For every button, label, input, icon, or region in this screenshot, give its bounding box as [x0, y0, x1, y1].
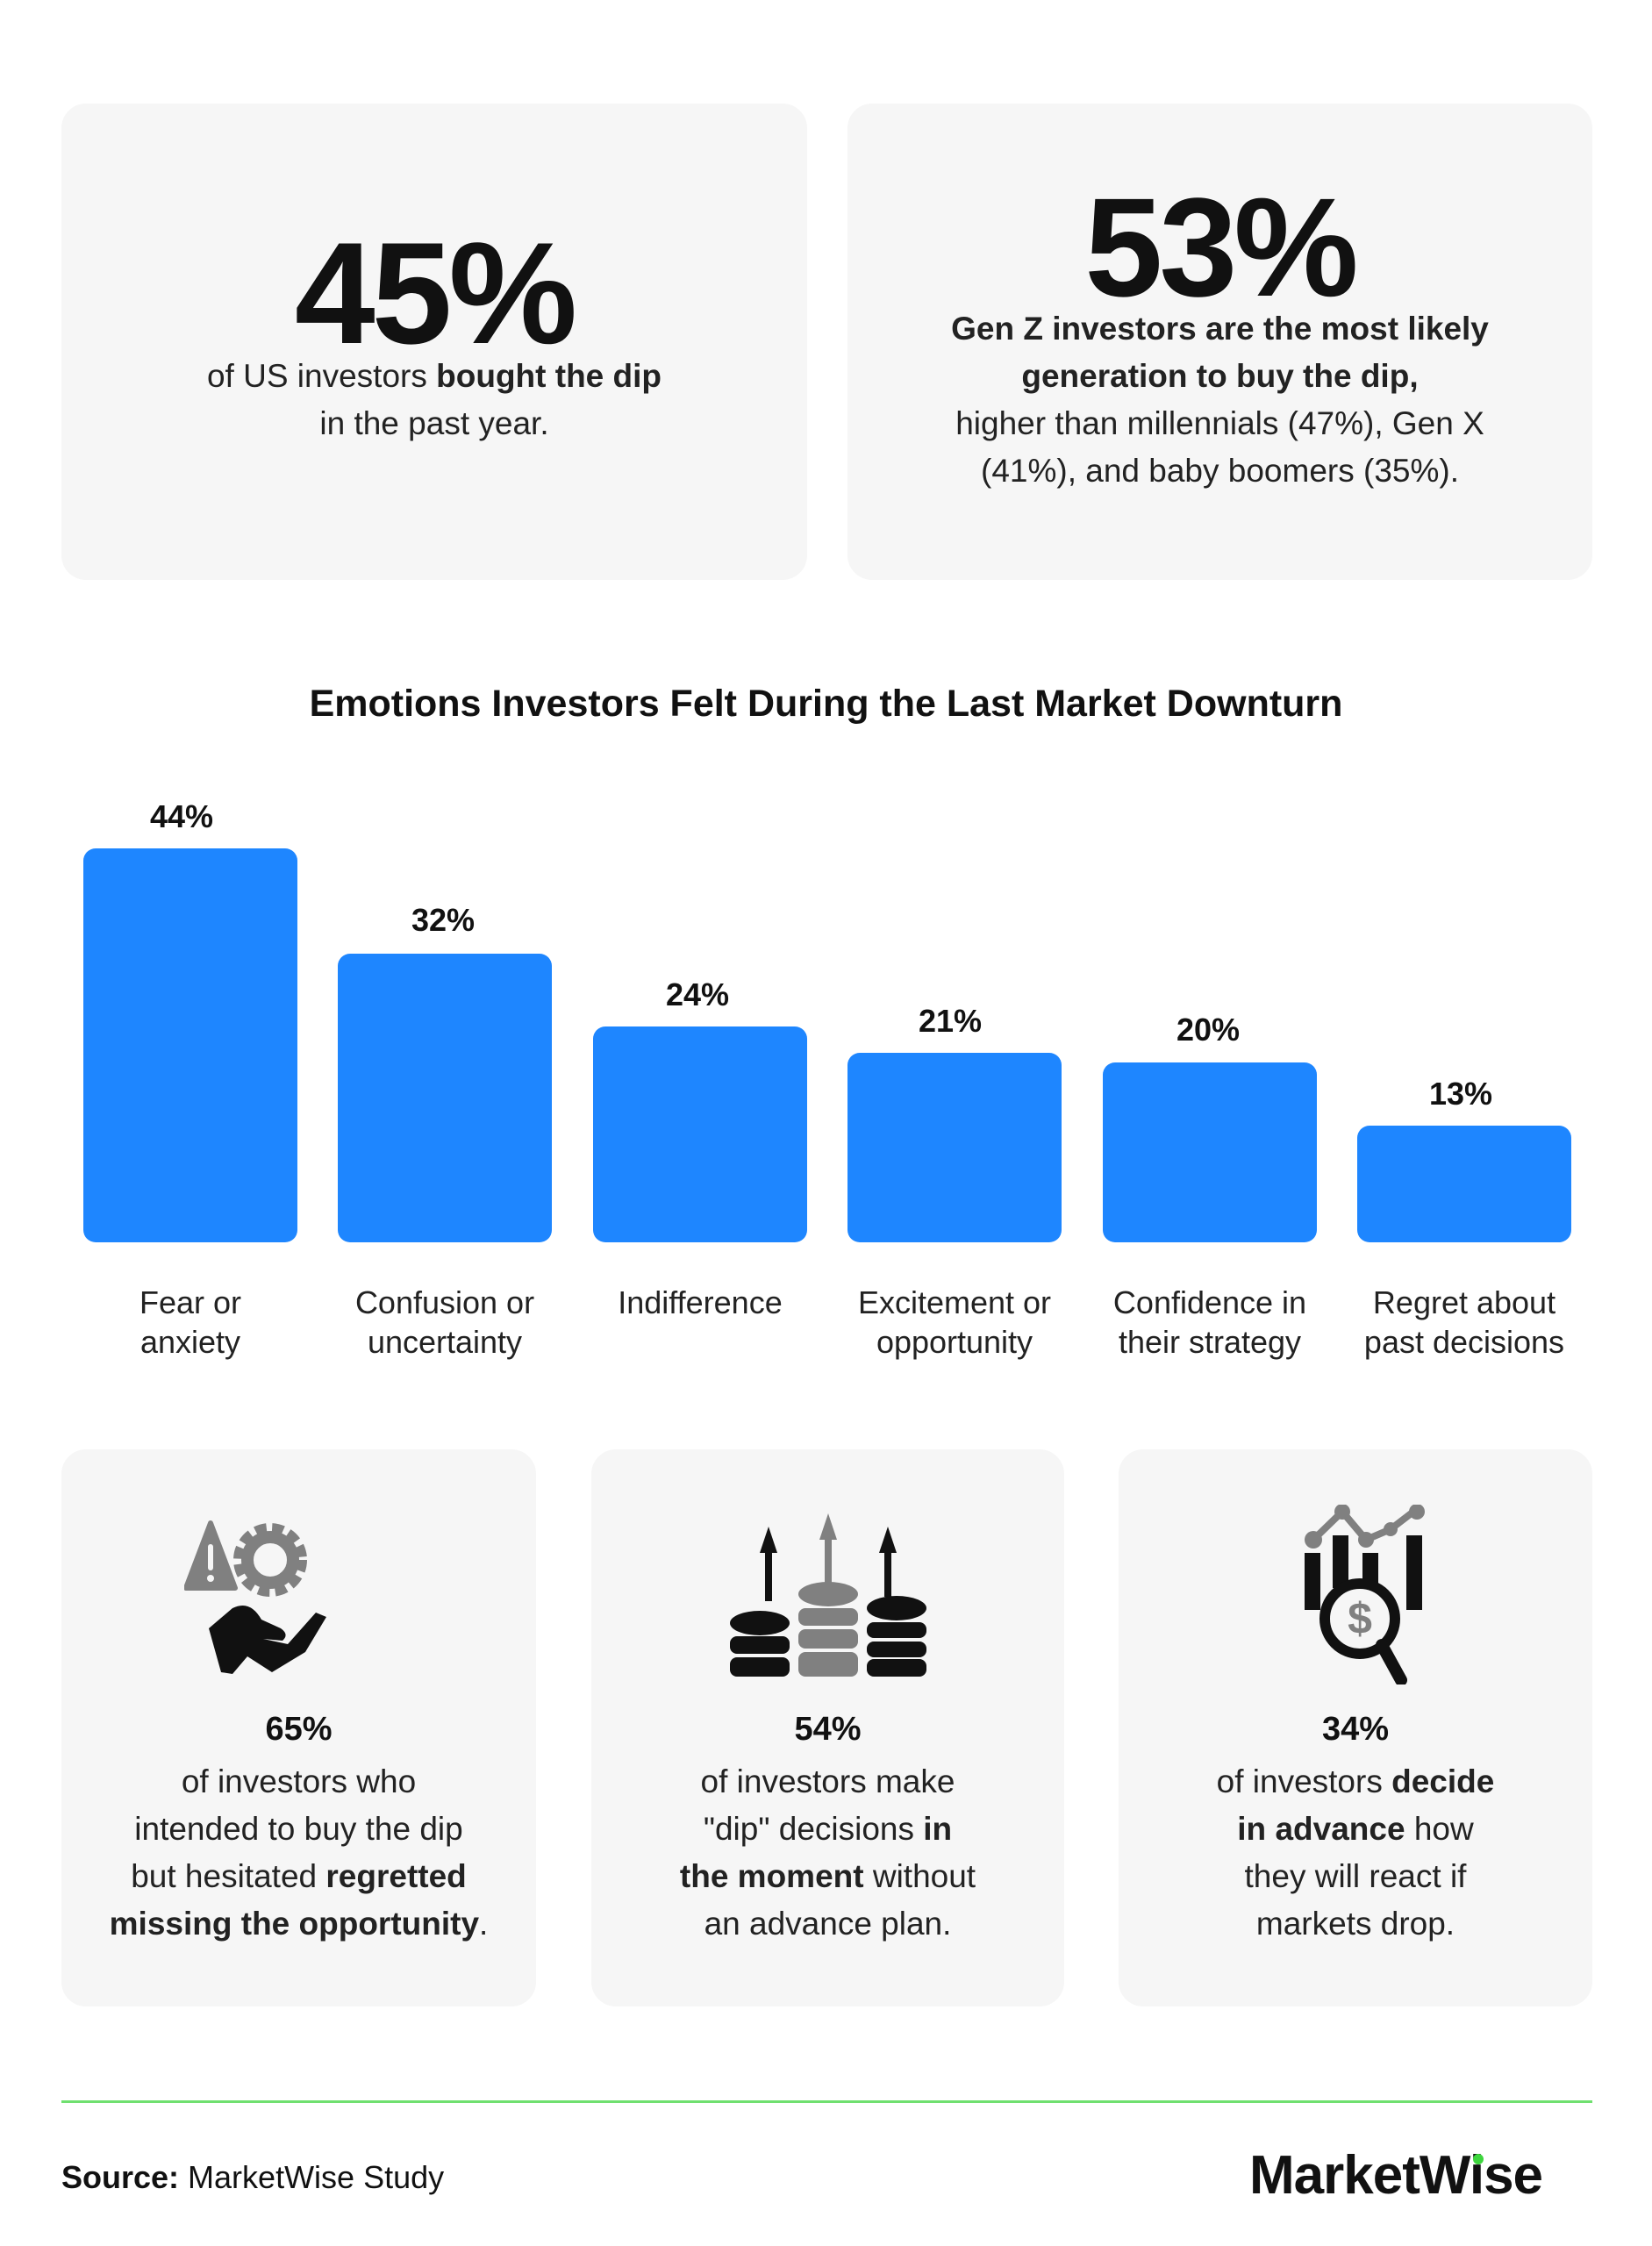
icon: coins with arrows [730, 1513, 926, 1677]
stat 65%: 65% [265, 1711, 333, 1748]
card: 54% [591, 1449, 1064, 2006]
text: they will react if [1245, 1858, 1466, 1894]
bar chart: Confusion or [355, 1284, 534, 1320]
text: intended to buy the dip [134, 1811, 463, 1847]
text: 45% description: in the past year. [319, 405, 549, 441]
bar chart: 21% [919, 1003, 982, 1039]
bar chart: 32% [411, 902, 475, 938]
text: 45% description [207, 358, 662, 441]
text: 45% description: of US investors bought the dip [207, 358, 662, 394]
stat 54%: 54% [794, 1711, 862, 1748]
bar chart: Indifference [618, 1284, 783, 1320]
text: Gen Z description [951, 311, 1489, 489]
text: Gen Z description: generation to buy the dip, [1021, 358, 1419, 394]
text [110, 1763, 488, 1942]
bar chart [83, 798, 1571, 1360]
stat 34%: 34% [1322, 1711, 1389, 1748]
text: "dip" decisions in [704, 1811, 952, 1847]
bar chart: Fear or [139, 1284, 241, 1320]
big stat 53%: 53% [1084, 168, 1355, 325]
bar chart: past decisions [1364, 1324, 1564, 1360]
text [680, 1763, 976, 1942]
text: of investors make [701, 1763, 955, 1799]
bar chart: 44% [150, 798, 213, 834]
text: Gen Z description: higher than millennials (47%), Gen X [955, 405, 1484, 441]
bar chart: anxiety [140, 1324, 240, 1360]
card: 65% [61, 1449, 536, 2006]
text: in advance how [1237, 1811, 1474, 1847]
icon: chart magnifier dollar [1305, 1505, 1425, 1684]
text: of investors who [182, 1763, 416, 1799]
big stat 45%: 45% [295, 212, 574, 374]
chart title: Emotions Investors Felt During the Last Market Downturn [310, 683, 1342, 725]
text: missing the opportunity. [110, 1906, 488, 1942]
bar chart: Excitement or [858, 1284, 1051, 1320]
text [1217, 1763, 1494, 1942]
text: Gen Z description: (41%), and baby boomers (35%). [981, 453, 1459, 489]
bar chart: opportunity [876, 1324, 1033, 1360]
bar chart: Regret about [1373, 1284, 1555, 1320]
logo: MarketWise: MarketWise [1249, 2145, 1542, 2206]
source: Source: MarketWise Study [61, 2159, 444, 2195]
text: markets drop. [1256, 1906, 1455, 1942]
text: Gen Z description: Gen Z investors are the most likely [951, 311, 1489, 347]
card: 53% [847, 104, 1592, 580]
bar chart: 20% [1176, 1012, 1240, 1048]
text: the moment without [680, 1858, 976, 1894]
text: but hesitated regretted [131, 1858, 467, 1894]
card: 45% [61, 104, 807, 580]
card: 34% [1119, 1449, 1592, 2006]
bar chart: 13% [1429, 1076, 1492, 1112]
bar chart: 24% [666, 976, 729, 1012]
text: an advance plan. [704, 1906, 951, 1942]
bar chart: uncertainty [368, 1324, 522, 1360]
bar chart: their strategy [1119, 1324, 1301, 1360]
text: of investors decide [1217, 1763, 1494, 1799]
icon: warning gear hand [184, 1520, 326, 1674]
bar chart: Confidence in [1113, 1284, 1306, 1320]
icon: chart magnifier dollar: $ [1348, 1594, 1372, 1643]
